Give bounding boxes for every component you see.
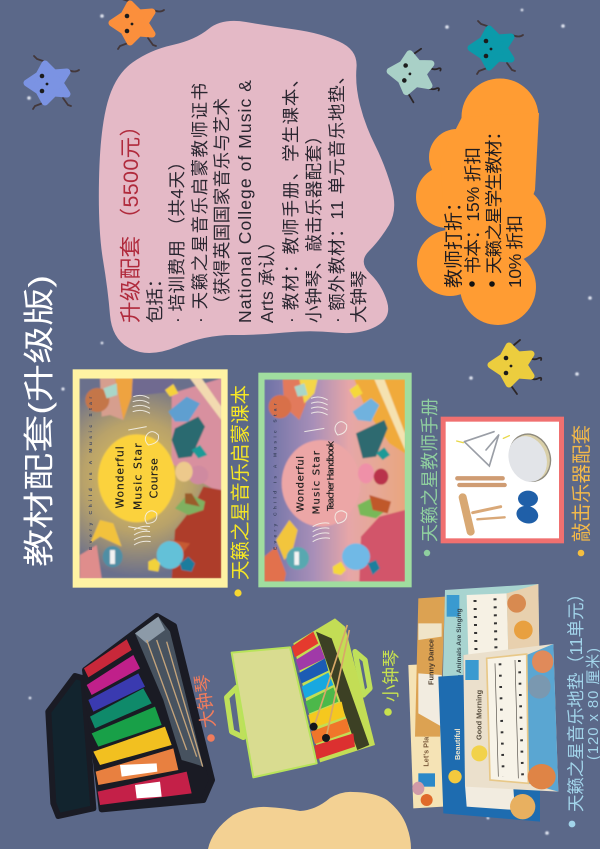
mat: lets play: [408, 663, 443, 808]
package details: 大钟琴: [349, 270, 369, 323]
handbook title: Teacher Handbook: [326, 440, 336, 512]
icon: tambourine: [502, 428, 557, 487]
panel: course book: [73, 369, 228, 588]
package details: [145, 67, 369, 323]
mat: animals singing: [442, 584, 539, 728]
mat: funny dance: [415, 597, 445, 737]
package details: 包括：: [145, 270, 165, 323]
icon: orange star: [112, 0, 164, 49]
book title: [88, 397, 160, 550]
icon: triangle: [457, 432, 509, 466]
mat: funny dance: Funny Dance: [426, 639, 435, 685]
felt: [316, 632, 369, 750]
pink blob background: [99, 21, 394, 353]
package details: · 培训费用 （共4天）: [167, 153, 187, 323]
handbook title: [273, 403, 336, 550]
mat: beautiful: Beautiful: [453, 729, 462, 760]
handbook title: Every Child Is A Music Star: [273, 403, 279, 550]
mat: animals singing: The Animals Are Singing: [456, 608, 463, 687]
book cover art: [79, 378, 221, 578]
mallets: [310, 625, 349, 742]
panel: large glockenspiel: [48, 616, 212, 816]
panel: upgrade package: [99, 21, 394, 353]
icon: maracas: [514, 491, 540, 526]
package details: · 额外教材：11 单元音乐地垫、: [327, 67, 347, 323]
discount text: 教师打折：: [443, 193, 465, 288]
icon: mint star: [388, 46, 442, 104]
label: teacher handbook: 天籁之星教师手册: [420, 398, 440, 542]
handbook title: Wonderful: [296, 456, 307, 512]
package heading: 升级配套 （5500元）: [119, 115, 143, 323]
panel: teacher discount: 书本：15% 折扣: [463, 147, 483, 274]
panel: percussion set: [441, 417, 564, 543]
icon: yellow star: [491, 340, 541, 394]
label: percussion set: 敲击乐器配套: [571, 425, 593, 542]
mat: beautiful: [438, 675, 540, 822]
handbook title: Music Star: [311, 450, 322, 514]
bars: [292, 632, 355, 759]
case handles: [227, 652, 370, 737]
mat: good morning: Good Morning: [475, 690, 484, 740]
label: large glockenspiel: 大钟琴: [192, 673, 219, 729]
mat: good morning: [463, 644, 558, 792]
carry bag: [48, 616, 212, 816]
package details: Arts 承认）: [257, 233, 277, 323]
label: music floor mats: [566, 585, 600, 827]
label: music floor mats: 天籁之星音乐地垫（11单元）: [566, 585, 586, 812]
bars: [84, 639, 192, 805]
mat: lets play: Let's Play: [421, 732, 430, 767]
plastic wrapped mallets: [135, 617, 203, 767]
photo frame: [441, 417, 564, 543]
book title: Course: [147, 458, 160, 498]
orange cloud: [416, 78, 546, 325]
icon: claves: [457, 478, 505, 485]
case base: [293, 618, 375, 762]
panel: teacher discount: [416, 78, 546, 325]
handbook cover art: [264, 379, 405, 582]
case lid: [232, 647, 317, 777]
package details: 小钟琴、敲击乐器配套）: [304, 127, 324, 323]
panel: small glockenspiel: [227, 618, 375, 777]
panel: teacher discount: 天籁之星学生教材：: [484, 123, 504, 274]
label: small glockenspiel: 小钟琴: [381, 650, 401, 702]
panel: teacher handbook: [258, 373, 412, 587]
panel: music floor mats: [408, 584, 558, 822]
decorative beige blob: [208, 792, 411, 849]
book title: Music Star: [132, 443, 145, 510]
label: course book: 天籁之星音乐启蒙课本: [230, 385, 252, 580]
package details: · 天籁之星音乐启蒙教师证书: [190, 83, 210, 323]
panel: teacher discount: 10% 折扣: [505, 215, 525, 288]
handbook frame: [258, 373, 412, 587]
icon: wood block: [463, 497, 505, 532]
package details: · 教材：教师手册、学生课本、: [281, 70, 301, 323]
package details: （获得英国国家音乐与艺术: [212, 98, 232, 313]
book title: Every Child Is A Music Star: [88, 397, 94, 550]
book title: Wonderful: [113, 446, 126, 508]
package details: National College of Music &: [235, 80, 255, 323]
icon: teal star: [471, 21, 523, 74]
icon: blue star: [27, 56, 79, 109]
title: 教材配套(升级版): [22, 275, 57, 567]
book frame: [73, 369, 228, 588]
